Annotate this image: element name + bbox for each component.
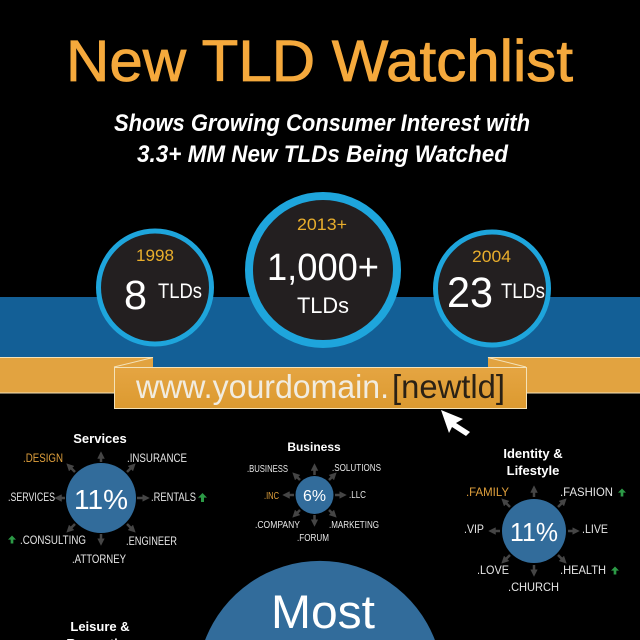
tld labels: identity and lifestyle: .LIVE — [582, 522, 608, 536]
circle: 2004: 2004 — [472, 247, 511, 266]
circle: 2013+: 2013+ — [297, 215, 347, 234]
icon: cursor arrow — [441, 410, 470, 436]
tld labels: identity and lifestyle: .CHURCH — [508, 580, 559, 594]
tld labels: business: .SOLUTIONS — [332, 463, 381, 474]
panel: leisure and recreation heading: Leisure & — [70, 619, 130, 634]
heading: identity and lifestyle: Identity & — [503, 446, 563, 461]
circle: 1998: 8 — [124, 272, 147, 318]
panel: services — [8, 431, 207, 566]
circle: 1998: 1998 — [136, 246, 174, 265]
tld labels: identity and lifestyle — [464, 485, 626, 594]
tld labels: services — [8, 451, 207, 566]
url text: www.yourdomain. — [135, 368, 389, 405]
subtitle: Shows Growing Consumer Interest with — [114, 110, 530, 137]
heading: business: Business — [287, 440, 341, 454]
percentage circle: identity 11%: 11% — [510, 517, 558, 547]
circle: 1998: TLDs — [158, 280, 202, 303]
title: New TLD Watchlist — [66, 29, 573, 94]
tld labels: business: .COMPANY — [255, 520, 300, 531]
heading: identity and lifestyle — [503, 446, 563, 478]
url text: [newtld] — [392, 368, 505, 405]
percentage circle: identity 11% — [502, 499, 566, 563]
tld labels: services: .CONSULTING — [20, 533, 86, 547]
tld labels: business: .LLC — [349, 490, 366, 501]
heading: identity and lifestyle: Lifestyle — [507, 463, 559, 478]
arrows: services — [58, 455, 146, 542]
tld labels: services: .DESIGN — [23, 451, 63, 465]
circle: 2013+ — [249, 196, 397, 344]
tld labels: identity and lifestyle: .VIP — [464, 522, 484, 536]
large circle: most: Most — [271, 585, 375, 638]
arrows: identity and lifestyle — [492, 489, 576, 573]
tld labels: business: .INC — [264, 491, 279, 502]
tld labels: services: .INSURANCE — [127, 451, 187, 465]
gold ribbon with URL — [0, 358, 640, 408]
subtitle — [114, 110, 530, 168]
circle: 2004: 23 — [447, 269, 493, 317]
tld labels: services: .ENGINEER — [126, 534, 177, 548]
panel: leisure and recreation heading — [66, 619, 134, 640]
tld labels: business — [247, 463, 381, 544]
tld labels: services: .SERVICES — [8, 490, 55, 504]
panel: business — [247, 440, 381, 544]
heading: services: Services — [73, 431, 127, 446]
circle: 2004 — [436, 232, 548, 345]
tld labels: identity and lifestyle: .FASHION — [560, 485, 613, 499]
arrows: business — [286, 467, 343, 523]
tld labels: business: .FORUM — [297, 533, 329, 544]
tld labels: business: .MARKETING — [329, 520, 379, 531]
percentage circle: business 6%: 6% — [303, 488, 326, 505]
large circle: most — [205, 561, 435, 640]
tld labels: identity and lifestyle: .HEALTH — [560, 563, 606, 577]
percentage circle: services 11%: 11% — [74, 484, 128, 515]
tld labels: identity and lifestyle: .LOVE — [477, 563, 509, 577]
panel: identity and lifestyle — [464, 446, 626, 594]
tld labels: business: .BUSINESS — [247, 464, 288, 475]
tld labels: services: .ATTORNEY — [72, 552, 126, 566]
circle: 2004: TLDs — [501, 280, 545, 303]
circle: 1998 — [98, 231, 212, 344]
tld labels: services: .RENTALS — [151, 490, 196, 504]
circle: 2013+: TLDs — [297, 293, 349, 318]
circle: 2013+: 1,000+ — [267, 247, 379, 289]
subtitle: 3.3+ MM New TLDs Being Watched — [137, 141, 509, 168]
blue timeline band — [0, 297, 640, 368]
tld labels: identity and lifestyle: .FAMILY — [466, 485, 509, 499]
percentage circle: services 11% — [66, 463, 136, 533]
